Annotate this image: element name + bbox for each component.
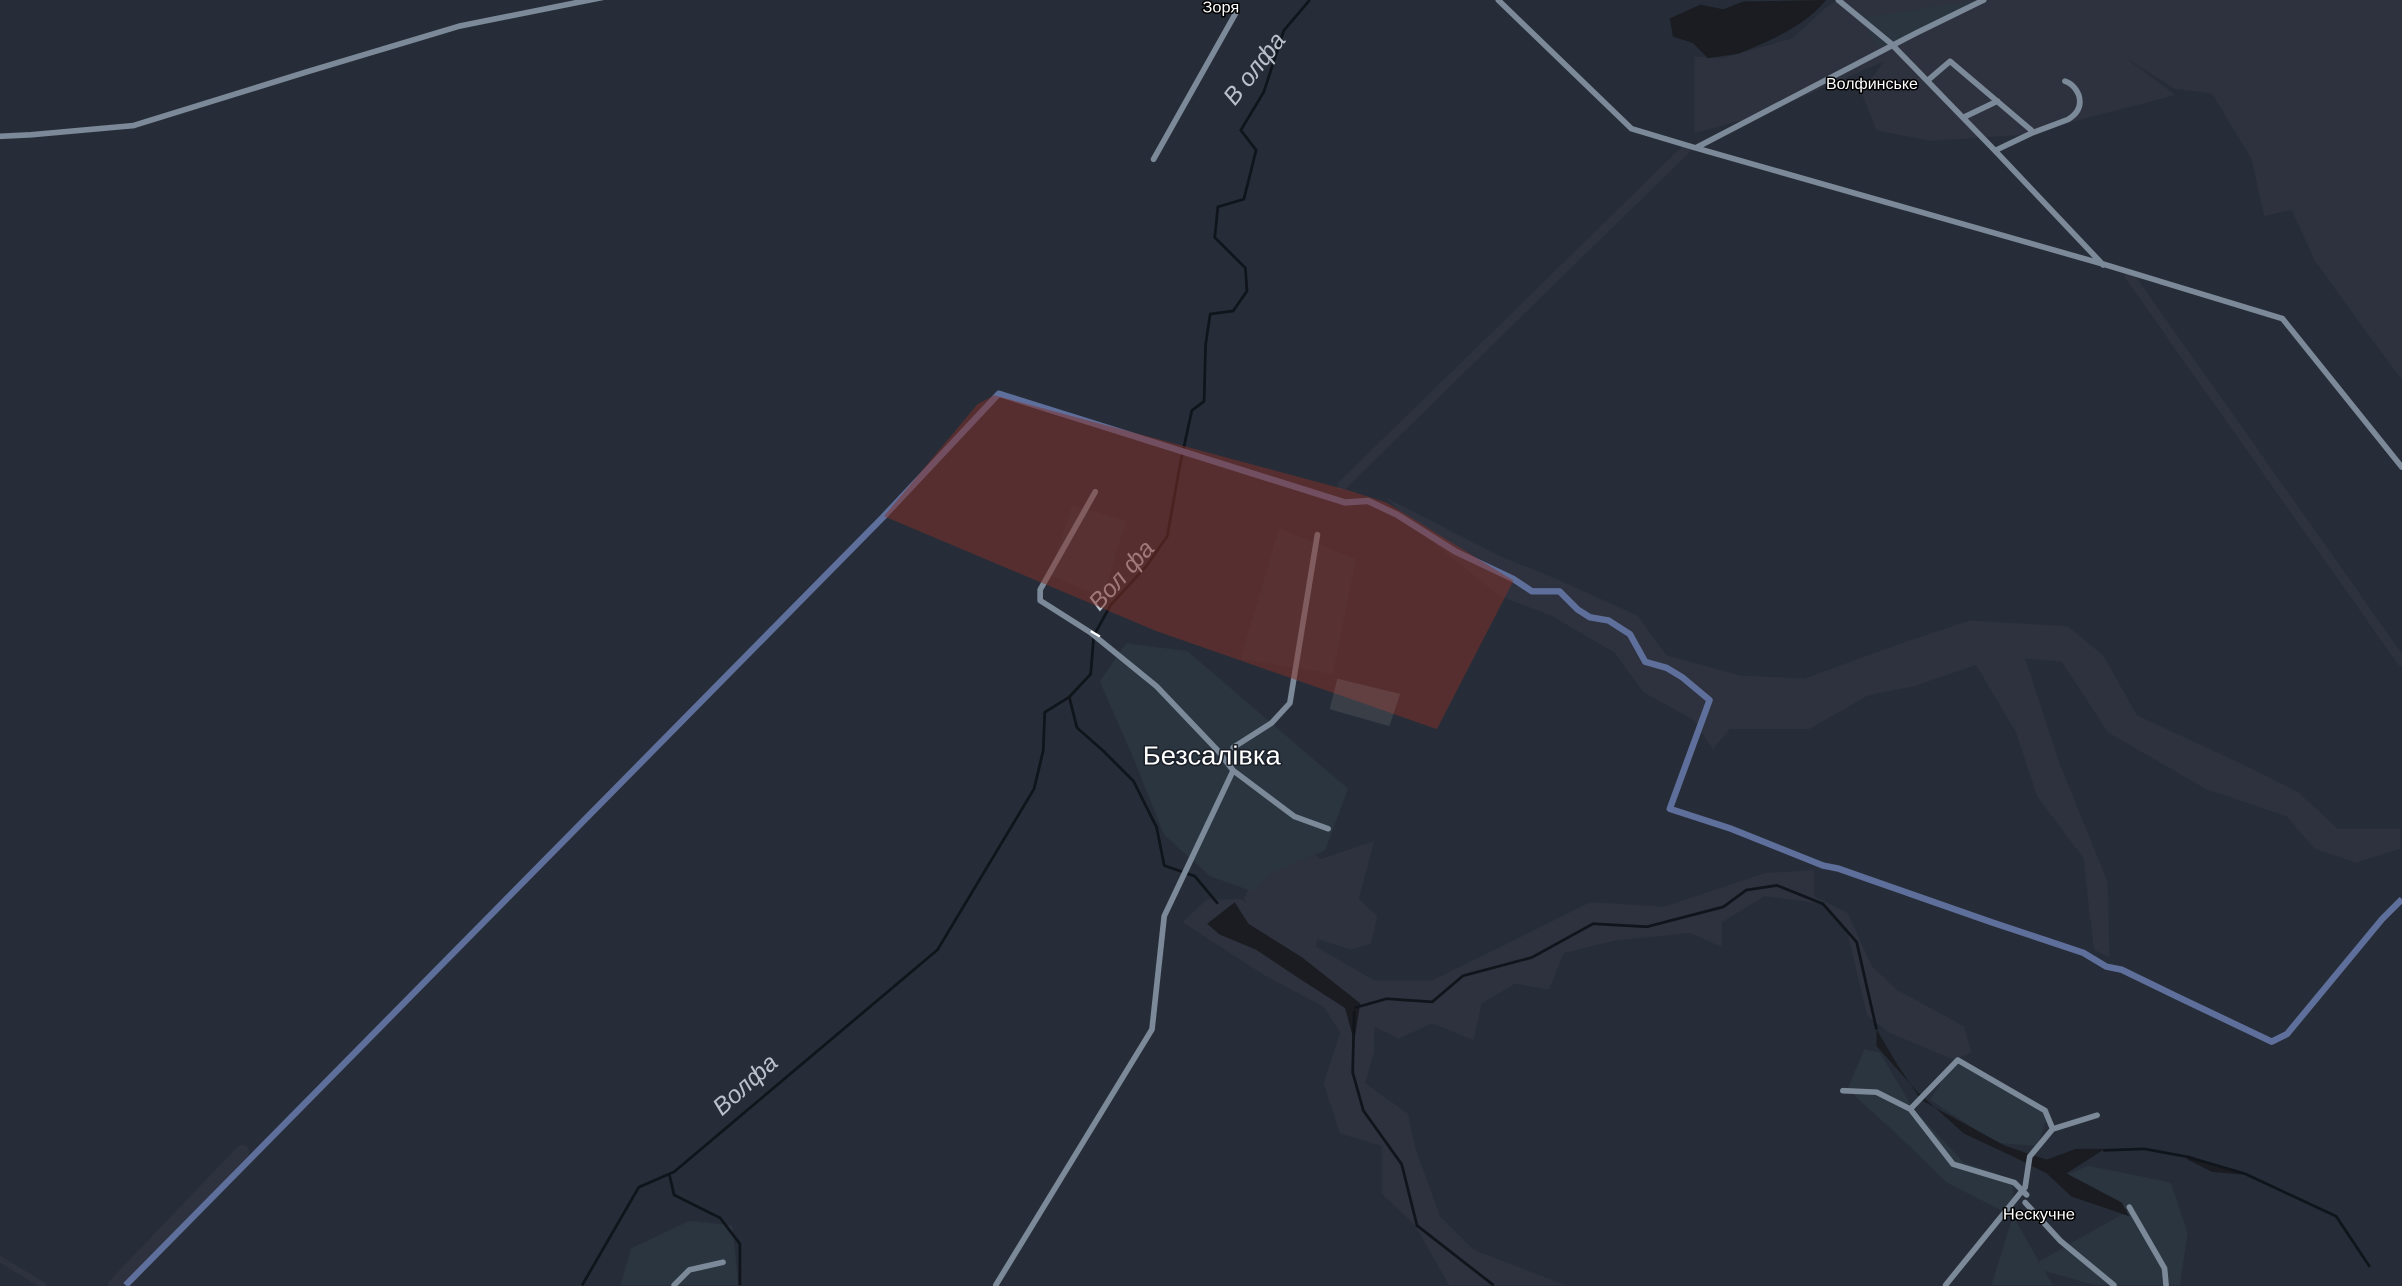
terrain: hills and valleys: [1183, 0, 2402, 1285]
river label: Волфа centre: Вол фа: [1084, 535, 1160, 616]
town label: Безсалівка: Безсалівка: [1143, 740, 1281, 770]
river label: Волфа top: В олфа: [1218, 27, 1291, 110]
river Volfa: [582, 0, 2370, 1285]
river label: Волфа lower: Волфа: [708, 1049, 783, 1121]
occupied area polygon: [884, 395, 1514, 729]
front line border: [126, 394, 2402, 1285]
residential areas: [620, 0, 2188, 1285]
white road tick: [1091, 631, 1100, 636]
water bodies: [1207, 0, 2246, 1216]
small building patch: [1330, 679, 1400, 726]
village label: Нескучне: Нескучне: [2003, 1205, 2075, 1223]
village label: Волфинське: Волфинське: [1826, 75, 1918, 93]
